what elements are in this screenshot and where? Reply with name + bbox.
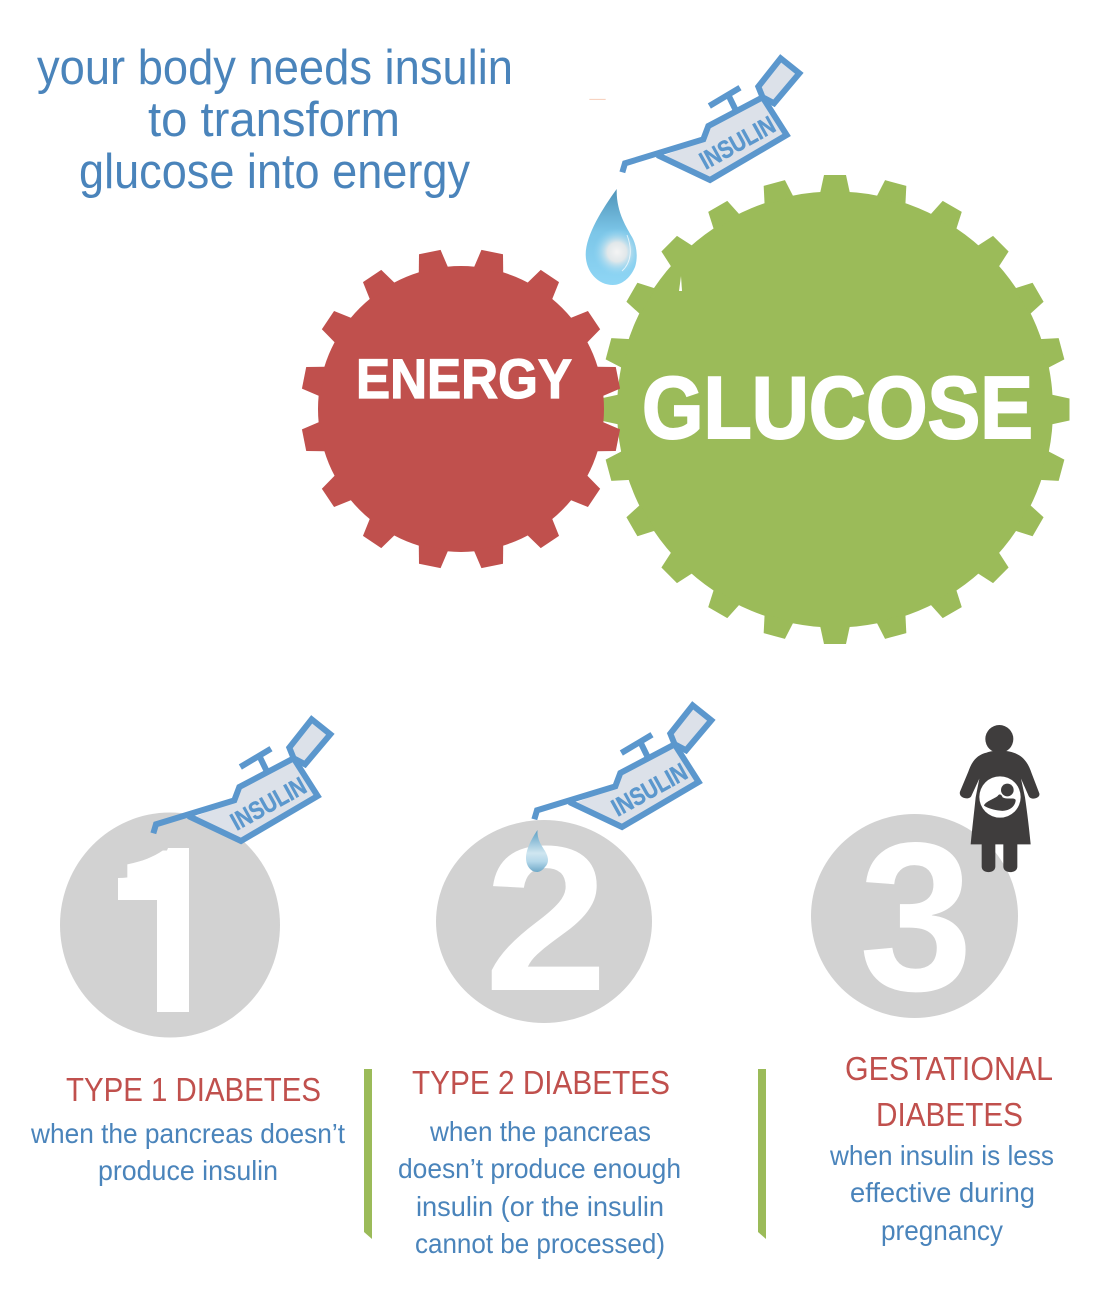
heading: type 2: TYPE 2 DIABETES: [412, 1064, 670, 1101]
description: gestational: effective during: [850, 1177, 1035, 1208]
label: energy: ENERGY: [356, 347, 572, 410]
panel: type 2 diabetes: [398, 705, 711, 1259]
description: type 2: when the pancreas: [429, 1116, 651, 1147]
icon: oil can, type 2: [534, 705, 711, 827]
divider bar 1: [364, 1069, 372, 1239]
description: type 2: insulin (or the insulin: [416, 1191, 664, 1222]
description: gestational: [829, 1140, 1054, 1246]
heading: gestational: [845, 1050, 1053, 1133]
gear: energy: [301, 249, 621, 569]
number badge 1: [60, 812, 280, 1038]
label: glucose: GLUCOSE: [642, 358, 1033, 457]
icon: pregnant woman: [960, 725, 1039, 872]
icon: oil can, type 2: INSULIN: [607, 758, 692, 822]
heading: gestational: DIABETES: [876, 1096, 1023, 1133]
description: type 1: [30, 1118, 345, 1186]
title: [37, 41, 513, 199]
description: type 2: [398, 1116, 681, 1259]
description: gestational: when insulin is less: [829, 1140, 1054, 1171]
gear: glucose: [600, 175, 1070, 644]
title: to transform: [148, 93, 400, 147]
number badge 3: 3: [859, 798, 973, 1035]
description: type 2: cannot be processed): [415, 1228, 665, 1259]
panel: type 1 diabetes: [30, 719, 345, 1186]
number badge 2: [436, 803, 652, 1034]
panel: gestational diabetes: [811, 725, 1054, 1246]
title: your body needs insulin: [37, 41, 513, 95]
icon: oil can, top: [589, 58, 799, 180]
description: type 1: when the pancreas doesn’t: [30, 1118, 345, 1149]
icon: small insulin drop: [526, 830, 548, 872]
number badge 3: [811, 798, 1018, 1035]
heading: gestational: GESTATIONAL: [845, 1050, 1053, 1087]
can label: INSULIN: [695, 111, 780, 175]
number badge 2: 2: [484, 803, 608, 1034]
description: type 1: produce insulin: [98, 1155, 278, 1186]
icon: large insulin drop: [586, 189, 637, 285]
icon: oil can, type 1: [153, 719, 330, 841]
icon: oil can, type 1: INSULIN: [226, 772, 311, 836]
divider bar 2: [758, 1069, 766, 1239]
number badge 1: 1: [105, 752, 227, 1077]
description: type 2: doesn’t produce enough: [398, 1153, 681, 1184]
description: gestational: pregnancy: [881, 1215, 1003, 1246]
heading: type 1: TYPE 1 DIABETES: [66, 1071, 321, 1108]
title: glucose into energy: [79, 145, 470, 199]
